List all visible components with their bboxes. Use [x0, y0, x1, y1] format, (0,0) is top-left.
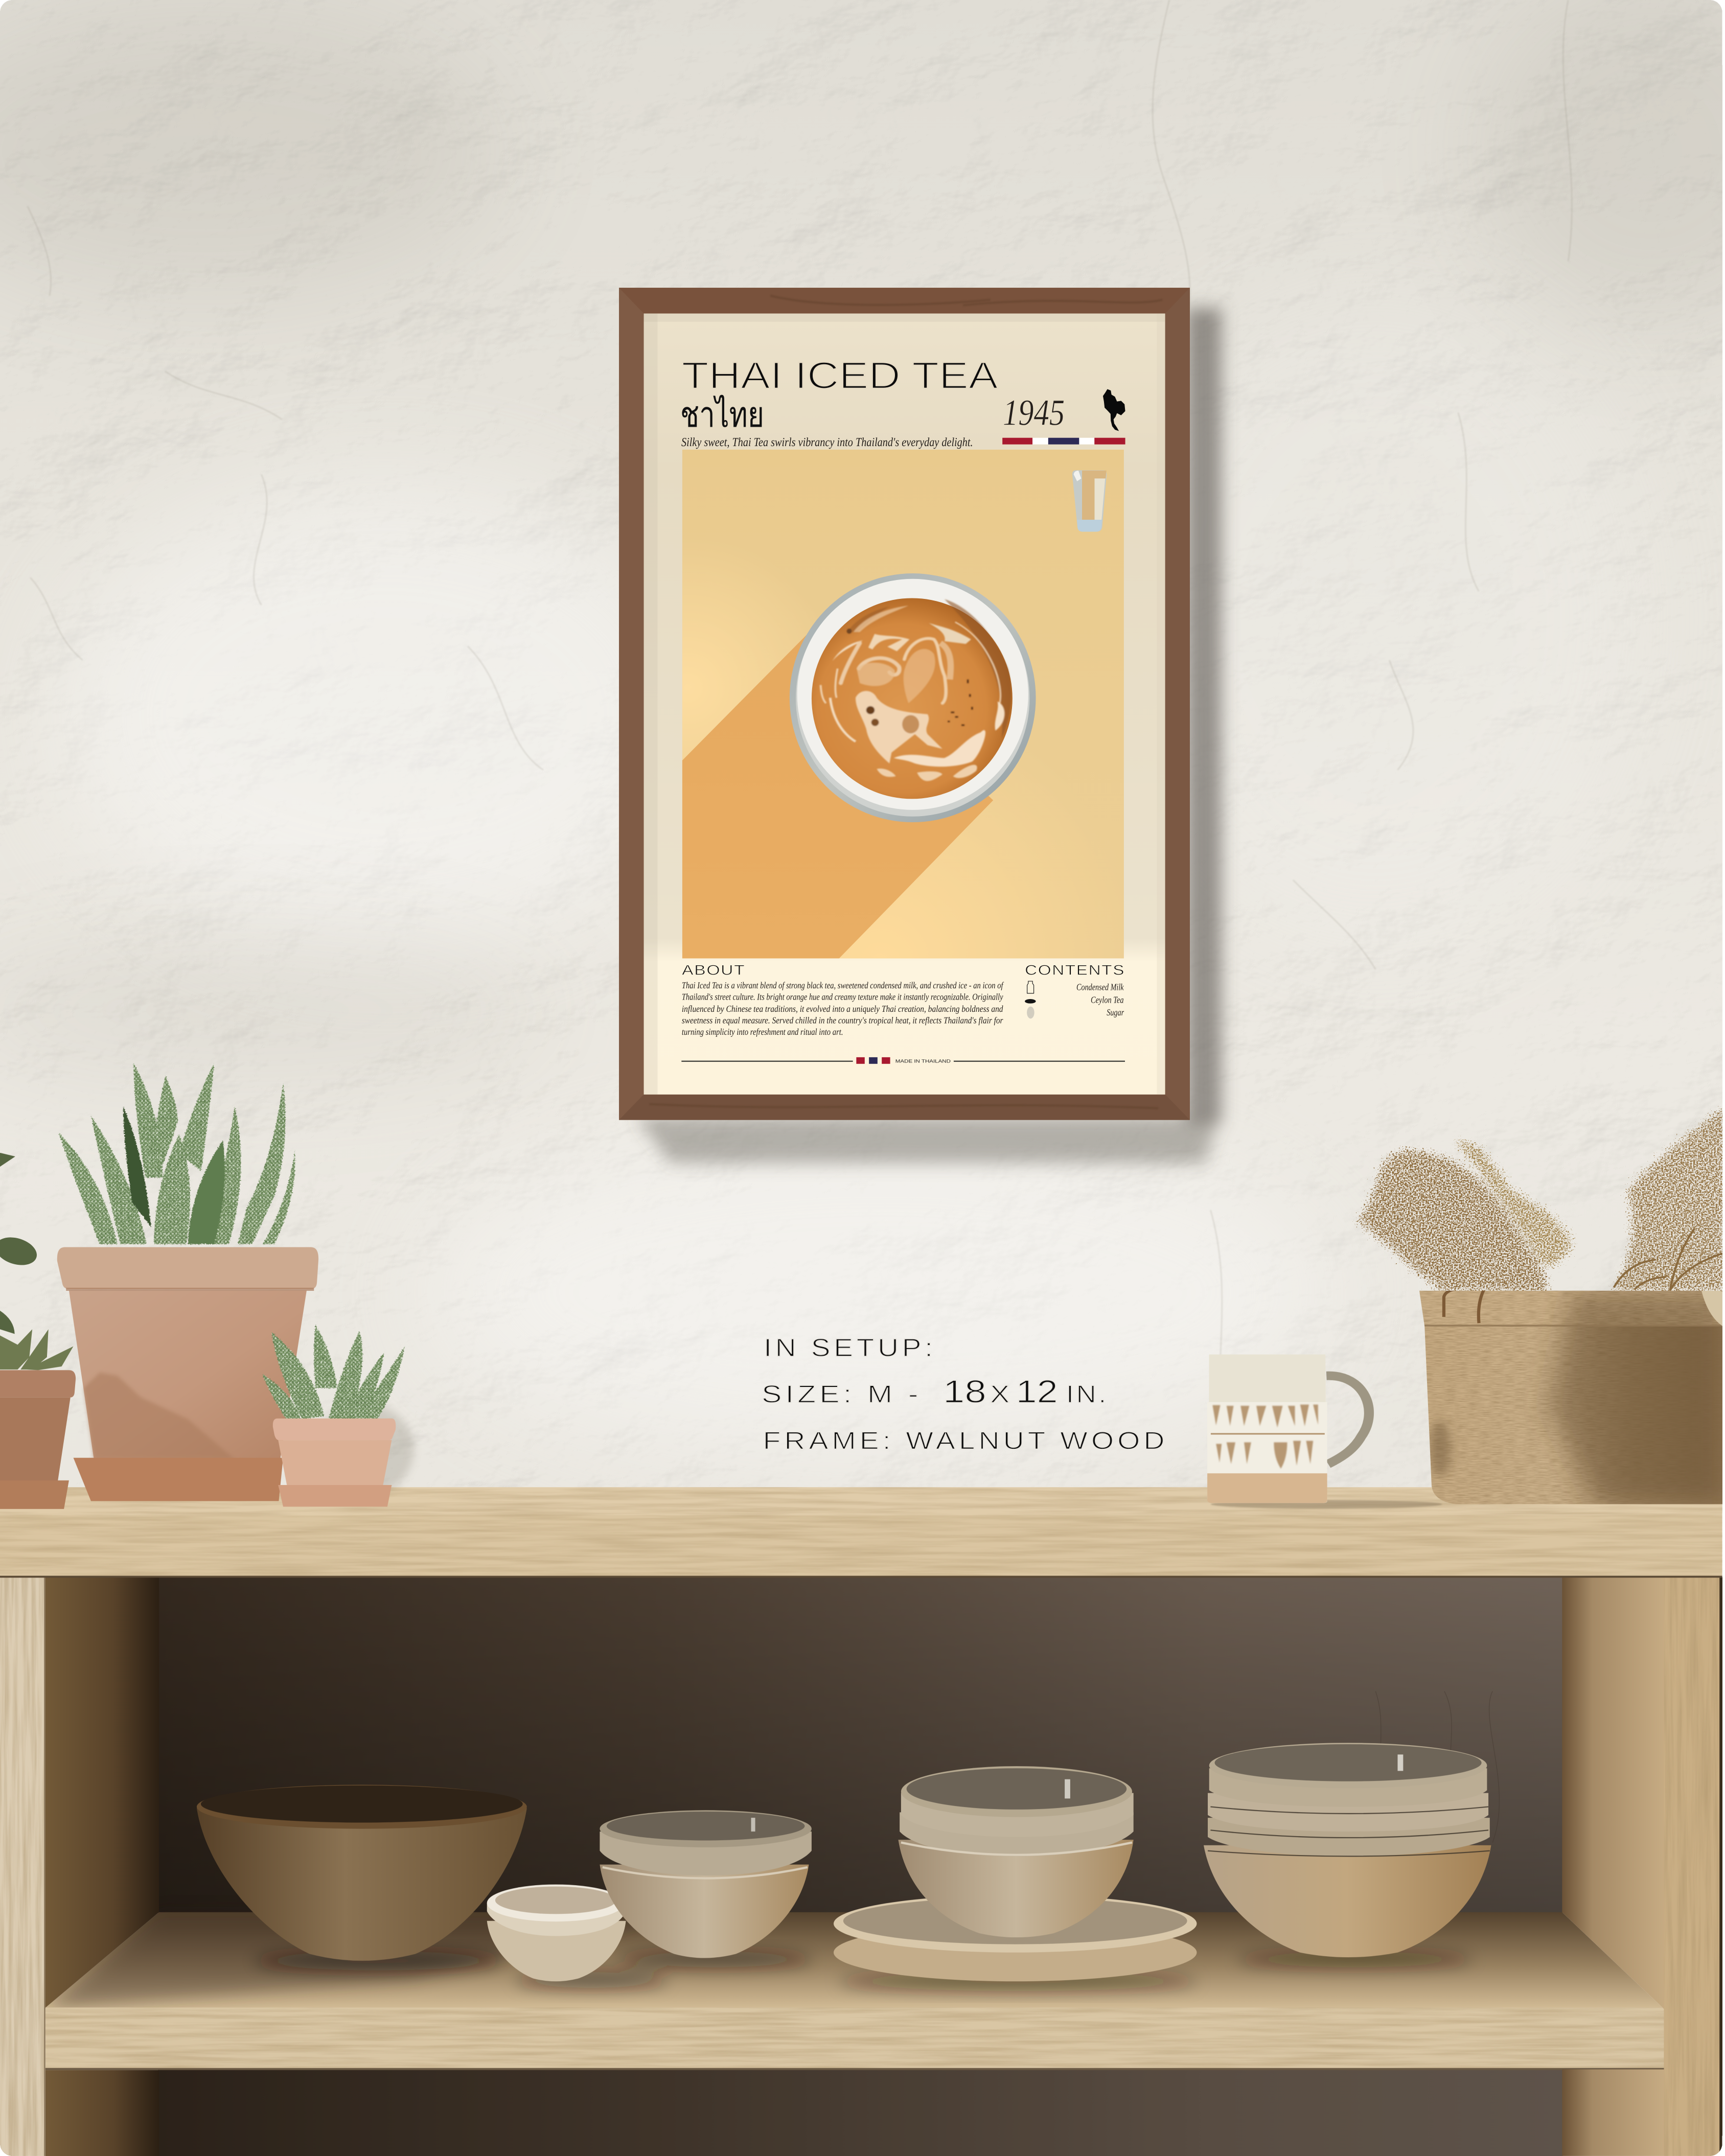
pampas grass right [1614, 1108, 1725, 1291]
panel: tea illustration [682, 450, 1124, 958]
bowl: cup of Thai tea from above [790, 573, 1036, 822]
tagline: Silky sweet, Thai Tea swirls vibrancy into Thailand's everyday delight. [681, 435, 973, 449]
text block: setup details: X [990, 1380, 1009, 1408]
Thai title: ชาไทย [680, 394, 764, 435]
poster mat [644, 313, 1165, 1095]
icon: tea leaves [1025, 999, 1036, 1004]
mug body [1207, 1354, 1327, 1503]
poster frame: walnut wood [619, 288, 1190, 1120]
left plant leaves [0, 1153, 74, 1370]
heading: contents: CONTENTS [1025, 964, 1125, 979]
year: 1945 [1003, 392, 1065, 433]
text block: setup details: 12 [1016, 1374, 1058, 1409]
shelf back wall [158, 1576, 1562, 2156]
mug shadow [1211, 1500, 1442, 1509]
pot: small left terracotta [0, 1370, 76, 1509]
icon: sugar [1027, 1007, 1034, 1018]
mug and basket [1207, 1108, 1725, 1509]
icon: iced tea glass [1072, 470, 1107, 531]
ingredient: sugar: Sugar [1107, 1008, 1124, 1018]
text block: about: sweetness in equal measure. Served chilled in the country's tropical heat, it reflects Thailand's flair for [682, 1016, 1003, 1026]
bowls: three-bowl stack [898, 1766, 1134, 1937]
bowls: small white pair [487, 1885, 626, 1981]
top shelf [0, 1487, 1722, 1578]
wall background [0, 0, 1725, 1513]
pot: large terracotta [57, 1247, 318, 1501]
long cup shadow [682, 630, 993, 958]
contents list [1025, 981, 1125, 1018]
shadows under bowls [255, 1951, 1472, 1991]
aloe: small plant [263, 1325, 405, 1419]
pampas grass left [1358, 1142, 1572, 1291]
text block: setup details: 18 [943, 1374, 986, 1409]
basket [1418, 1289, 1725, 1504]
text block: setup details: SIZE: M - [762, 1380, 922, 1408]
text block: setup details [762, 1333, 1168, 1454]
text block: setup details: IN SETUP: [764, 1333, 936, 1362]
left side panel [0, 1577, 159, 2156]
frame shadow on wall [635, 308, 1222, 1163]
tea swirl [821, 599, 1011, 781]
ingredient: condensed milk: Condensed Milk [1076, 983, 1125, 993]
icon: Thailand map silhouette [1103, 389, 1125, 431]
lower shelf [44, 1912, 1665, 2070]
plates [834, 1895, 1197, 1981]
text block: about: turning simplicity into refreshment and ritual into art. [682, 1028, 843, 1038]
heading: about: ABOUT [682, 964, 745, 979]
ingredient: ceylon tea: Ceylon Tea [1091, 996, 1124, 1006]
shelf unit [0, 1487, 1725, 2156]
text block: about [682, 981, 1004, 1038]
potted aloe plants [0, 1063, 413, 1509]
footer: made in Thailand [681, 1057, 1125, 1064]
plant shadow on wall [314, 1404, 413, 1496]
right side panel [1562, 1577, 1725, 2156]
Thai flag stripe [1002, 438, 1125, 445]
aloe: large plant [59, 1063, 295, 1244]
icon: milk bottle [1027, 981, 1034, 993]
bowl: large brown [197, 1785, 527, 1961]
bowls: two-bowl stack [600, 1810, 812, 1958]
pot: small right terracotta [273, 1419, 396, 1506]
text block: about: influenced by Chinese tea traditions, it evolved into a uniquely Thai creation, balancing boldness and [682, 1005, 1004, 1014]
footer: made in Thailand: MADE IN THAILAND [895, 1059, 952, 1064]
text block: setup details: IN. [1066, 1380, 1109, 1408]
poster title: THAI ICED TEA [682, 354, 999, 397]
mug handle [1326, 1376, 1369, 1464]
text block: about: Thai Iced Tea is a vibrant blend of strong black tea, sweetened condensed milk, and crushed ice - an icon of [682, 981, 1004, 991]
text block: about: Thailand's street culture. Its bright orange hue and creamy texture make it instantly recognizable. Originally [682, 993, 1003, 1003]
text block: setup details: FRAME: WALNUT WOOD [763, 1427, 1168, 1454]
bowls: four-bowl stack [1204, 1743, 1491, 1957]
